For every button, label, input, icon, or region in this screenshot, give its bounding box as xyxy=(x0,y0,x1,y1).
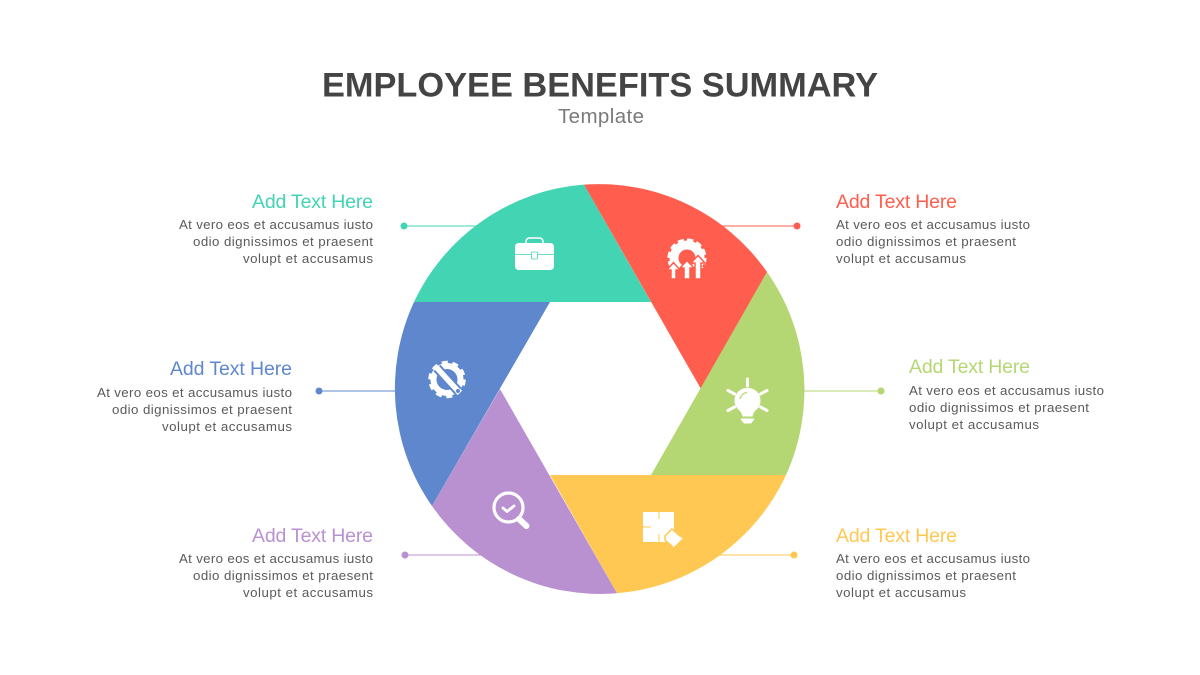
text block: blue: Add Text Here xyxy=(170,358,292,380)
text block: teal: odio dignissimos et praesent xyxy=(193,234,373,249)
text block: green: odio dignissimos et praesent xyxy=(909,400,1089,415)
text block: green: Add Text Here xyxy=(909,356,1030,378)
subtitle: Template xyxy=(558,105,644,128)
text block: red xyxy=(836,191,1030,266)
text block: green: At vero eos et accusamus iusto xyxy=(909,383,1104,398)
text block: red: At vero eos et accusamus iusto xyxy=(836,217,1030,232)
text block: blue xyxy=(97,358,292,434)
text block: blue: At vero eos et accusamus iusto xyxy=(97,385,292,400)
text block: purple: odio dignissimos et praesent xyxy=(193,568,373,583)
text block: green xyxy=(909,356,1104,432)
text block: red: odio dignissimos et praesent xyxy=(836,234,1016,249)
connector: red xyxy=(720,222,800,230)
segment: purple xyxy=(432,389,617,594)
text block: teal: volupt et accusamus xyxy=(243,251,373,266)
text block: yellow: Add Text Here xyxy=(836,525,957,547)
text block: yellow: odio dignissimos et praesent xyxy=(836,568,1016,583)
icon: magnifier with check xyxy=(494,493,526,526)
text block: green: volupt et accusamus xyxy=(909,417,1039,432)
text block: purple: At vero eos et accusamus iusto xyxy=(179,551,373,566)
text block: red: Add Text Here xyxy=(836,191,957,213)
connector: yellow xyxy=(700,552,798,558)
title: EMPLOYEE BENEFITS SUMMARY xyxy=(322,66,878,104)
text block: teal: At vero eos et accusamus iusto xyxy=(179,217,373,232)
segment: yellow xyxy=(550,475,786,593)
connector: blue xyxy=(316,388,400,394)
text block: yellow: volupt et accusamus xyxy=(836,585,966,600)
segment: teal xyxy=(414,185,651,302)
icon: briefcase xyxy=(515,238,554,270)
connector: teal xyxy=(400,222,482,230)
icon: gear with wrench xyxy=(430,362,464,396)
icon: gear with arrows xyxy=(666,240,708,281)
connector: purple xyxy=(402,552,490,558)
segment: green xyxy=(651,272,804,475)
text block: purple: volupt et accusamus xyxy=(243,585,373,600)
text block: yellow: At vero eos et accusamus iusto xyxy=(836,551,1030,566)
icon: light bulb xyxy=(728,379,767,424)
text block: red: volupt et accusamus xyxy=(836,251,966,266)
connector: green xyxy=(800,388,884,394)
text block: blue: volupt et accusamus xyxy=(162,419,292,434)
text block: yellow xyxy=(836,525,1030,600)
text block: purple: Add Text Here xyxy=(252,525,373,547)
segment: blue xyxy=(395,302,550,506)
text block: teal: Add Text Here xyxy=(252,191,373,213)
segmented circle xyxy=(395,184,804,594)
icon: puzzle pieces xyxy=(643,512,684,548)
text block: teal xyxy=(179,191,373,266)
text block: purple xyxy=(179,525,373,600)
text block: blue: odio dignissimos et praesent xyxy=(112,402,292,417)
segment: red xyxy=(584,184,767,389)
